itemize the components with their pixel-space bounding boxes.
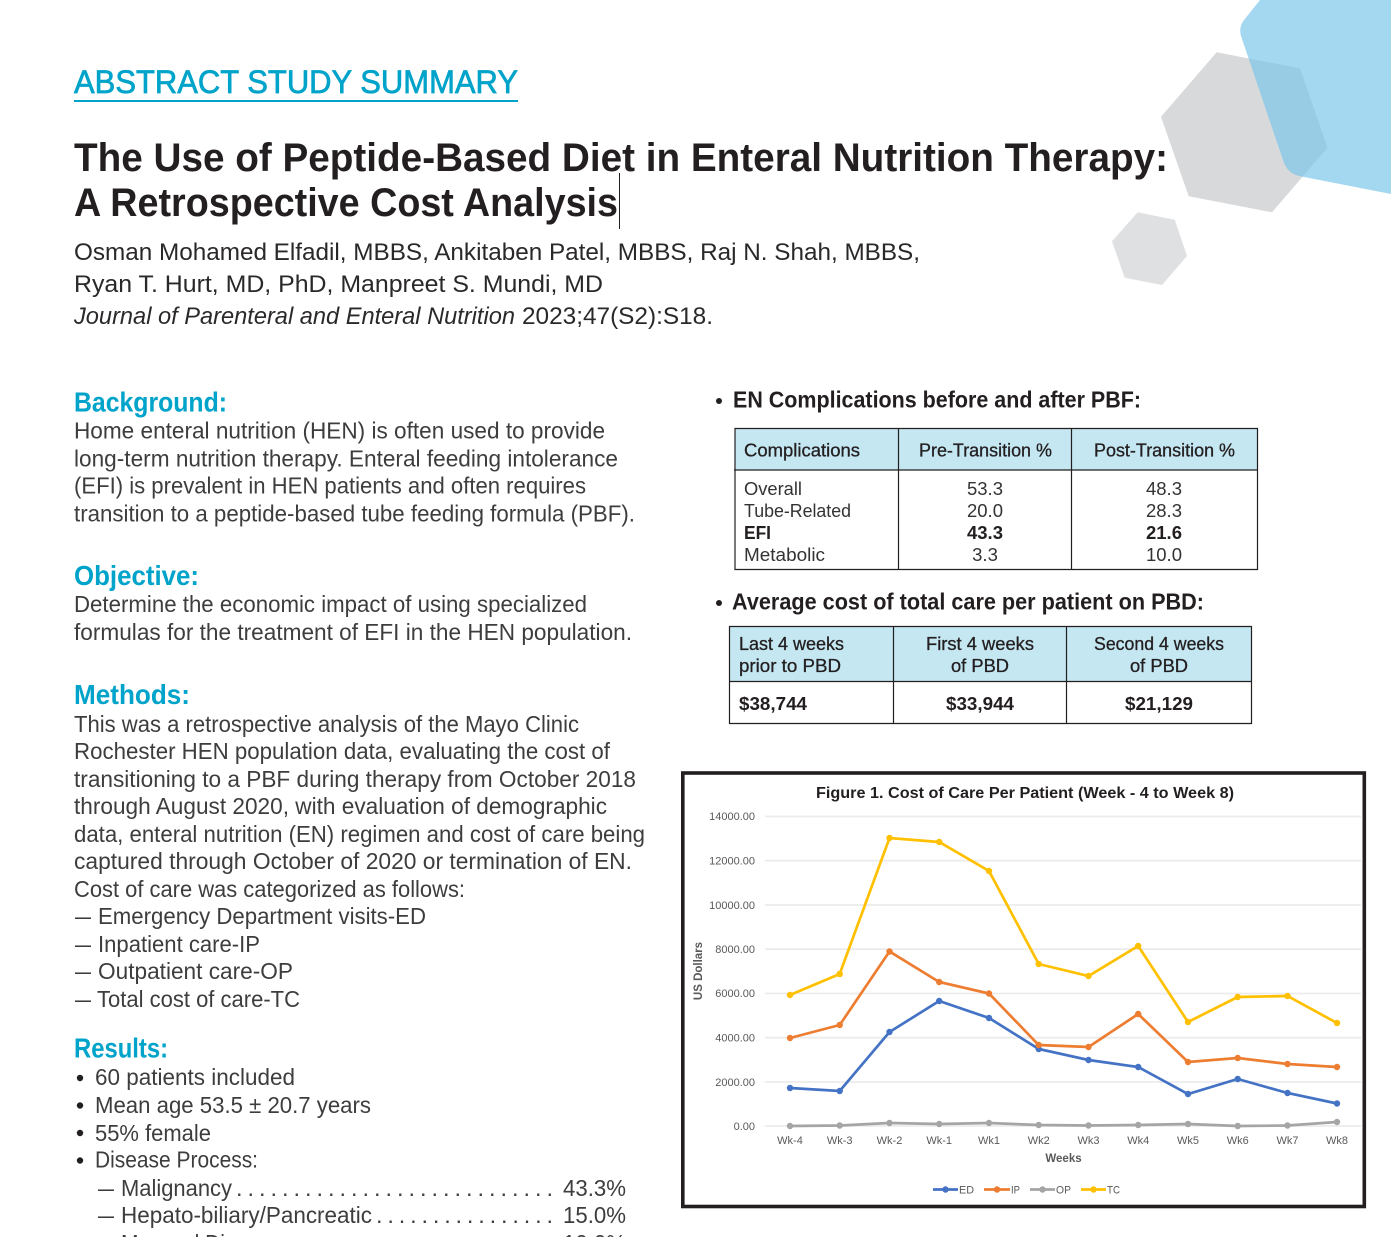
table: complications: 53.3 xyxy=(967,478,1003,499)
table: complications: EFI xyxy=(744,522,771,543)
chart title: Figure 1. Cost of Care Per Patient (Week - 4 to Week 8) xyxy=(816,785,1234,802)
x axis labels: Wk3 xyxy=(1078,1135,1100,1147)
section: methods xyxy=(74,679,645,1012)
table: complications: 21.6 xyxy=(1146,522,1182,543)
title xyxy=(74,136,1168,229)
table: complications: Overall xyxy=(744,478,802,499)
section: methods: Methods: xyxy=(74,679,190,710)
section: methods: Outpatient care-OP xyxy=(98,958,293,984)
x axis labels: Wk8 xyxy=(1326,1135,1348,1147)
authors and citation: Ryan T. Hurt, MD, PhD, Manpreet S. Mundi, MD xyxy=(74,271,603,298)
section: results: 15.0% xyxy=(563,1202,626,1228)
section: background: transition to a peptide-based tube feeding formula (PBF). xyxy=(74,500,635,526)
section: background: long-term nutrition therapy. Enteral feeding intolerance xyxy=(74,446,618,472)
y axis labels: 8000.00 xyxy=(715,944,755,956)
section: results: Malignancy xyxy=(121,1175,232,1201)
table: average cost: Second 4 weeks xyxy=(1094,633,1224,654)
y axis title: US Dollars xyxy=(693,942,705,1000)
authors and citation xyxy=(73,239,920,330)
x axis labels: Wk2 xyxy=(1028,1135,1050,1147)
section: methods: This was a retrospective analysis of the Mayo Clinic xyxy=(74,711,579,737)
legend: TC xyxy=(1107,1184,1120,1196)
title: A Retrospective Cost Analysis xyxy=(74,181,618,225)
section: methods: Inpatient care-IP xyxy=(98,931,260,957)
table: complications: 43.3 xyxy=(967,522,1003,543)
table: complications: 48.3 xyxy=(1146,478,1182,499)
y axis labels: 2000.00 xyxy=(715,1077,755,1089)
section: methods: captured through October of 2020 or termination of EN. xyxy=(74,848,632,874)
x axis labels: Wk5 xyxy=(1177,1135,1199,1147)
section: results: ............................ xyxy=(236,1175,553,1201)
table: complications: Complications xyxy=(744,440,860,460)
table: complications: 28.3 xyxy=(1146,500,1182,521)
section: background xyxy=(74,386,635,526)
table: average cost: Last 4 weeks xyxy=(739,633,844,654)
header label: ABSTRACT STUDY SUMMARY xyxy=(74,64,518,100)
section: results: Results: xyxy=(74,1032,168,1064)
section: results: — xyxy=(98,1175,114,1201)
x axis labels xyxy=(777,1135,1348,1147)
section: methods: Emergency Department visits-ED xyxy=(98,903,426,929)
section: results: Disease Process: xyxy=(95,1146,258,1172)
x axis labels: Wk4 xyxy=(1127,1135,1149,1147)
legend: IP xyxy=(1011,1184,1020,1196)
x axis labels: Wk-1 xyxy=(926,1135,952,1147)
x axis labels: Wk6 xyxy=(1227,1135,1249,1147)
title: The Use of Peptide-Based Diet in Enteral Nutrition Therapy: xyxy=(74,136,1168,180)
series: OP xyxy=(787,1119,1340,1129)
y axis labels: 4000.00 xyxy=(715,1032,755,1044)
table: average cost xyxy=(730,626,1252,724)
table: average cost: $21,129 xyxy=(1125,693,1193,714)
section: background: Background: xyxy=(74,386,227,418)
section: results: 55% female xyxy=(95,1120,211,1146)
y axis labels: 6000.00 xyxy=(715,988,755,1000)
heading: EN complications: EN Complications before and after PBF: xyxy=(733,386,1141,412)
table: complications: Tube-Related xyxy=(744,500,851,521)
legend xyxy=(933,1184,1120,1196)
section: background: Home enteral nutrition (HEN) is often used to provide xyxy=(74,418,605,444)
section: methods: Cost of care was categorized as follows: xyxy=(74,876,465,902)
table: average cost: prior to PBD xyxy=(739,655,841,676)
section: methods: transitioning to a PBF during therapy from October 2018 xyxy=(74,766,636,792)
series: TC xyxy=(787,835,1340,1026)
section: objective: Objective: xyxy=(74,560,199,591)
section: results: ................ xyxy=(376,1202,553,1228)
y axis labels xyxy=(709,811,755,1133)
y axis labels: 10000.00 xyxy=(709,900,755,912)
section: results: Mean age 53.5 ± 20.7 years xyxy=(95,1092,371,1118)
table: complications: 10.0 xyxy=(1146,544,1182,565)
section: results: 43.3% xyxy=(563,1175,626,1201)
authors and citation: Osman Mohamed Elfadil, MBBS, Ankitaben Patel, MBBS, Raj N. Shah, MBBS, xyxy=(74,239,920,266)
table: average cost: $38,744 xyxy=(739,693,808,714)
section: results: 60 patients included xyxy=(95,1064,295,1090)
table: complications: Post-Transition % xyxy=(1094,440,1235,460)
section: methods: — xyxy=(75,986,91,1012)
x axis labels: Wk-4 xyxy=(777,1135,803,1147)
table: complications: 20.0 xyxy=(967,500,1003,521)
legend: OP xyxy=(1056,1184,1071,1196)
series: IP xyxy=(787,948,1340,1070)
table: average cost: $33,944 xyxy=(946,693,1015,714)
y axis labels: 0.00 xyxy=(734,1121,755,1133)
section: methods: — xyxy=(75,958,91,984)
series: ED xyxy=(787,998,1340,1107)
section: objective xyxy=(74,560,632,645)
legend: ED xyxy=(959,1184,974,1196)
y axis labels: 12000.00 xyxy=(709,856,755,868)
table: complications: Pre-Transition % xyxy=(919,440,1052,460)
section: background: (EFI) is prevalent in HEN patients and often requires xyxy=(74,472,586,498)
authors and citation: Journal of Parenteral and Enteral Nutrition xyxy=(73,303,515,330)
section: objective: Determine the economic impact of using specialized xyxy=(74,591,587,617)
section: results: Hepato-biliary/Pancreatic xyxy=(121,1202,372,1228)
authors and citation: 2023;47(S2):S18. xyxy=(522,303,713,330)
x axis labels: Wk-2 xyxy=(877,1135,902,1147)
section: methods: Total cost of care-TC xyxy=(97,986,300,1012)
section: objective: formulas for the treatment of EFI in the HEN population. xyxy=(74,619,632,645)
section: methods: — xyxy=(75,931,91,957)
decorative hexagon shapes xyxy=(1112,0,1391,285)
table: average cost: of PBD xyxy=(951,655,1009,676)
x axis labels: Wk1 xyxy=(978,1135,1000,1147)
x axis labels: Wk-3 xyxy=(827,1135,853,1147)
heading: average cost: Average cost of total care per patient on PBD: xyxy=(732,588,1204,614)
table: complications: 3.3 xyxy=(972,544,998,565)
x axis title: Weeks xyxy=(1045,1153,1082,1165)
section: methods: — xyxy=(75,903,91,929)
section: methods: Rochester HEN population data, evaluating the cost of xyxy=(74,738,610,764)
section: methods: data, enteral nutrition (EN) regimen and cost of care being xyxy=(74,821,645,847)
table: complications xyxy=(734,428,1258,570)
section: results xyxy=(74,1032,626,1237)
table: average cost: of PBD xyxy=(1130,655,1188,676)
section: methods: through August 2020, with evaluation of demographic xyxy=(74,793,607,819)
section: results: — xyxy=(98,1202,114,1228)
x axis labels: Wk7 xyxy=(1276,1135,1298,1147)
y axis labels: 14000.00 xyxy=(709,811,755,823)
table: average cost: First 4 weeks xyxy=(926,633,1034,654)
line chart: cost of care per patient xyxy=(683,773,1364,1206)
table: complications: Metabolic xyxy=(744,544,825,565)
